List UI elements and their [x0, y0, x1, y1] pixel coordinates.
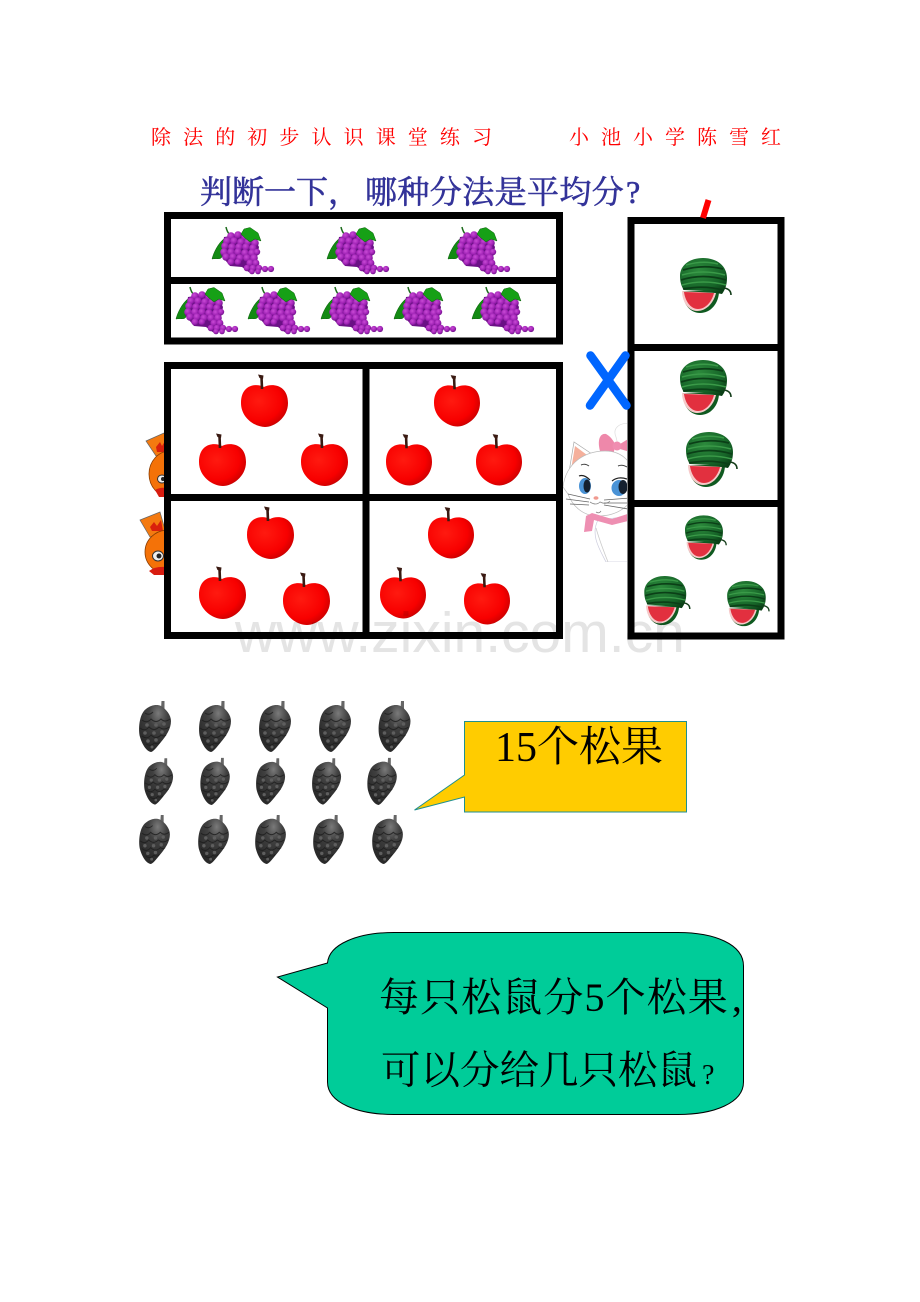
yellow callout shape	[414, 722, 686, 812]
mark: blue cross	[590, 356, 626, 406]
author line: 小池小学陈雪红	[569, 126, 793, 149]
grapes box frame	[168, 216, 560, 341]
worksheet title: 除法的初步认识课堂练习	[151, 126, 504, 149]
green speech bubble shape	[278, 932, 744, 1114]
grapes top row	[212, 227, 510, 274]
heading: ?	[626, 174, 640, 210]
icon: orange character bottom	[140, 512, 164, 575]
heading: 判断一下，	[200, 174, 360, 210]
callout: 15 pine cones	[414, 722, 686, 812]
grapes bottom row	[176, 287, 534, 334]
icon: orange character top	[146, 432, 164, 497]
callout: question	[278, 932, 744, 1114]
apples box frame	[168, 366, 560, 636]
pine cones row 2	[144, 758, 397, 805]
pine cones row 1	[139, 701, 410, 752]
pine cones group	[139, 701, 410, 864]
illustration: white cat	[563, 423, 627, 562]
apples bottom-left cell	[199, 506, 330, 625]
question line 2: 可以分给几只松鼠?	[381, 1049, 714, 1093]
apples top-left cell	[199, 374, 348, 486]
watermelon top cell	[680, 258, 731, 313]
green bubble question text	[379, 975, 743, 1093]
apples top-right cell	[386, 375, 522, 485]
heading	[200, 174, 640, 210]
panel: grapes	[168, 216, 560, 341]
mark: red tick	[703, 200, 708, 218]
question line 1: 每只松鼠分5个松果,	[379, 975, 743, 1020]
watermelon box frame	[631, 220, 781, 636]
heading: 哪种分法是平均分	[365, 174, 624, 210]
panel: watermelons	[631, 220, 781, 636]
panel: apples	[168, 366, 560, 636]
pine cones row 3	[139, 815, 403, 864]
apples bottom-right cell	[380, 507, 510, 624]
watermelons bottom cell	[644, 515, 769, 626]
watermark: www.zixin.com.cn	[234, 601, 685, 665]
yellow callout text: 15个松果	[495, 725, 663, 771]
watermelons middle cell	[680, 360, 737, 487]
